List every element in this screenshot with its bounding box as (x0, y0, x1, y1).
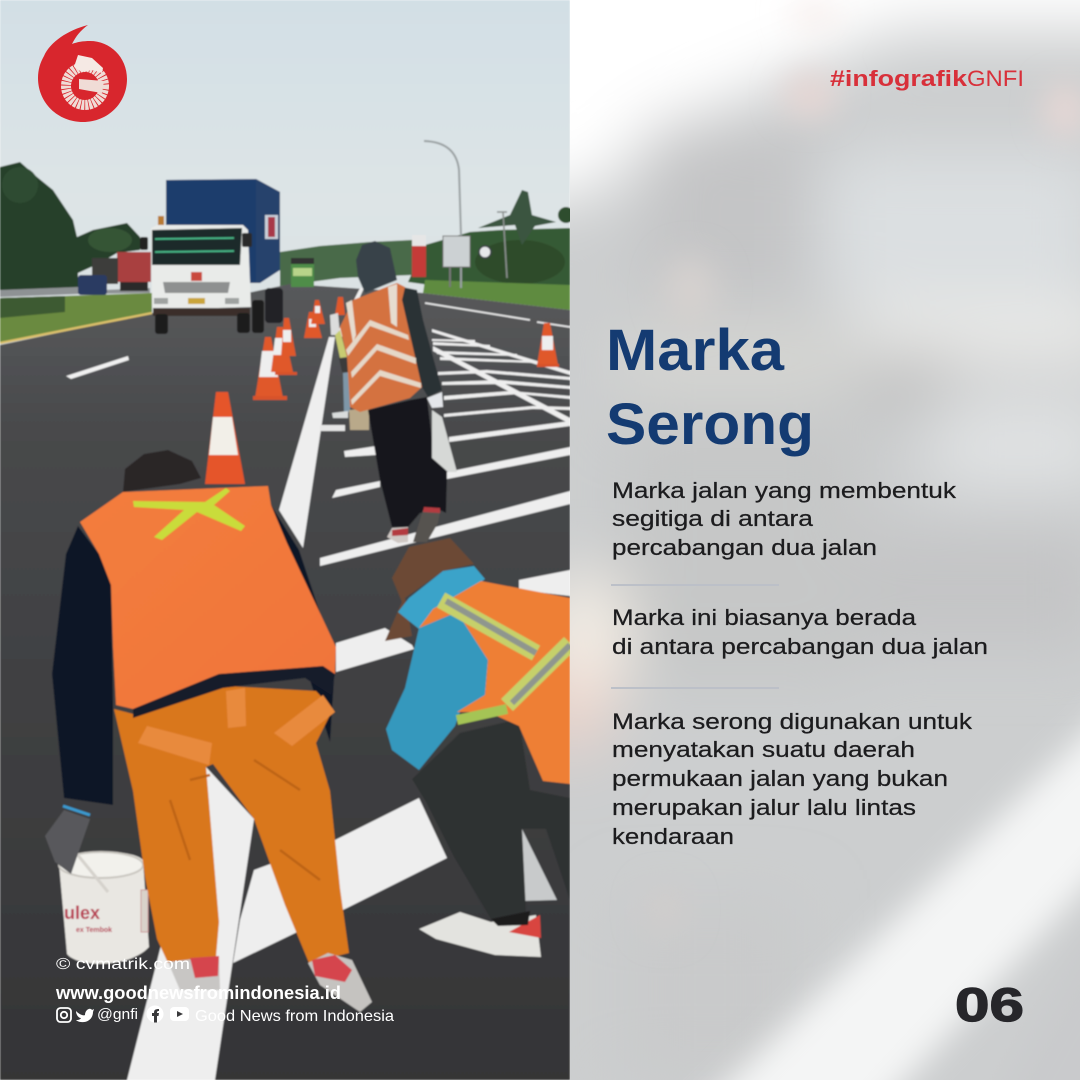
person behind (320, 313, 369, 431)
text block: function: permukaan jalan yang bukan (612, 766, 948, 791)
icon: instagram (57, 1008, 71, 1022)
text block: location: di antara percabangan dua jalan (612, 634, 988, 659)
truck (140, 179, 283, 334)
road markings: edge line (127, 288, 364, 1080)
icon: twitter (76, 1009, 94, 1022)
guard rail (0, 287, 150, 297)
social name: Good News from Indonesia (195, 1008, 394, 1025)
street lamp (424, 141, 461, 288)
worker with back turned, hooded (340, 241, 457, 543)
text block: location: Marka ini biasanya berada (612, 605, 917, 630)
page number: 06 (955, 978, 1024, 1031)
title: Serong (606, 392, 814, 457)
traffic cones (205, 297, 559, 484)
road signs (412, 235, 491, 287)
photo credit: © cvmatrik.com (56, 956, 190, 973)
distant vehicles (78, 252, 314, 295)
text block: function: kendaraan (612, 824, 734, 849)
text block: function: merupakan jalur lalu lintas (612, 795, 916, 820)
road markings: chevron stripes (233, 329, 570, 963)
logo (38, 25, 127, 122)
icon: youtube (170, 1007, 189, 1021)
text block: function: menyatakan suatu daerah (612, 737, 915, 762)
title: Marka (606, 318, 785, 383)
trees and palms on the right (408, 189, 570, 286)
title (606, 318, 814, 457)
text block: definition: percabangan dua jalan (612, 535, 877, 560)
worker in orange, bending (45, 450, 372, 1012)
white paint bucket (59, 848, 149, 964)
grass verges (0, 293, 152, 343)
social media row (57, 1006, 394, 1025)
social handle: @gnfi (97, 1007, 138, 1023)
trees on the left (0, 162, 140, 292)
text block: function: Marka serong digunakan untuk (612, 709, 973, 734)
white paint bucket: ex Tembok (76, 927, 112, 934)
hashtag: #infografik (830, 66, 968, 91)
panel: blurred right background (570, 0, 1080, 1080)
road surface (0, 284, 570, 1080)
worker in blue, crouching (385, 538, 570, 957)
road markings: centre dash (66, 356, 129, 379)
text block: definition: Marka jalan yang membentuk (612, 478, 957, 503)
white paint bucket: ulex (64, 903, 100, 923)
distant tree line (280, 240, 412, 286)
icon: facebook (146, 1006, 164, 1022)
text block: location (612, 605, 988, 659)
website: www.goodnewsfromindonesia.id (55, 983, 341, 1003)
text block: definition: segitiga di antara (612, 506, 814, 531)
sky (0, 0, 570, 345)
hashtag: GNFI (967, 66, 1024, 91)
panel: road photo (0, 0, 574, 1080)
text block: function (612, 709, 973, 849)
text block: definition (612, 478, 957, 560)
